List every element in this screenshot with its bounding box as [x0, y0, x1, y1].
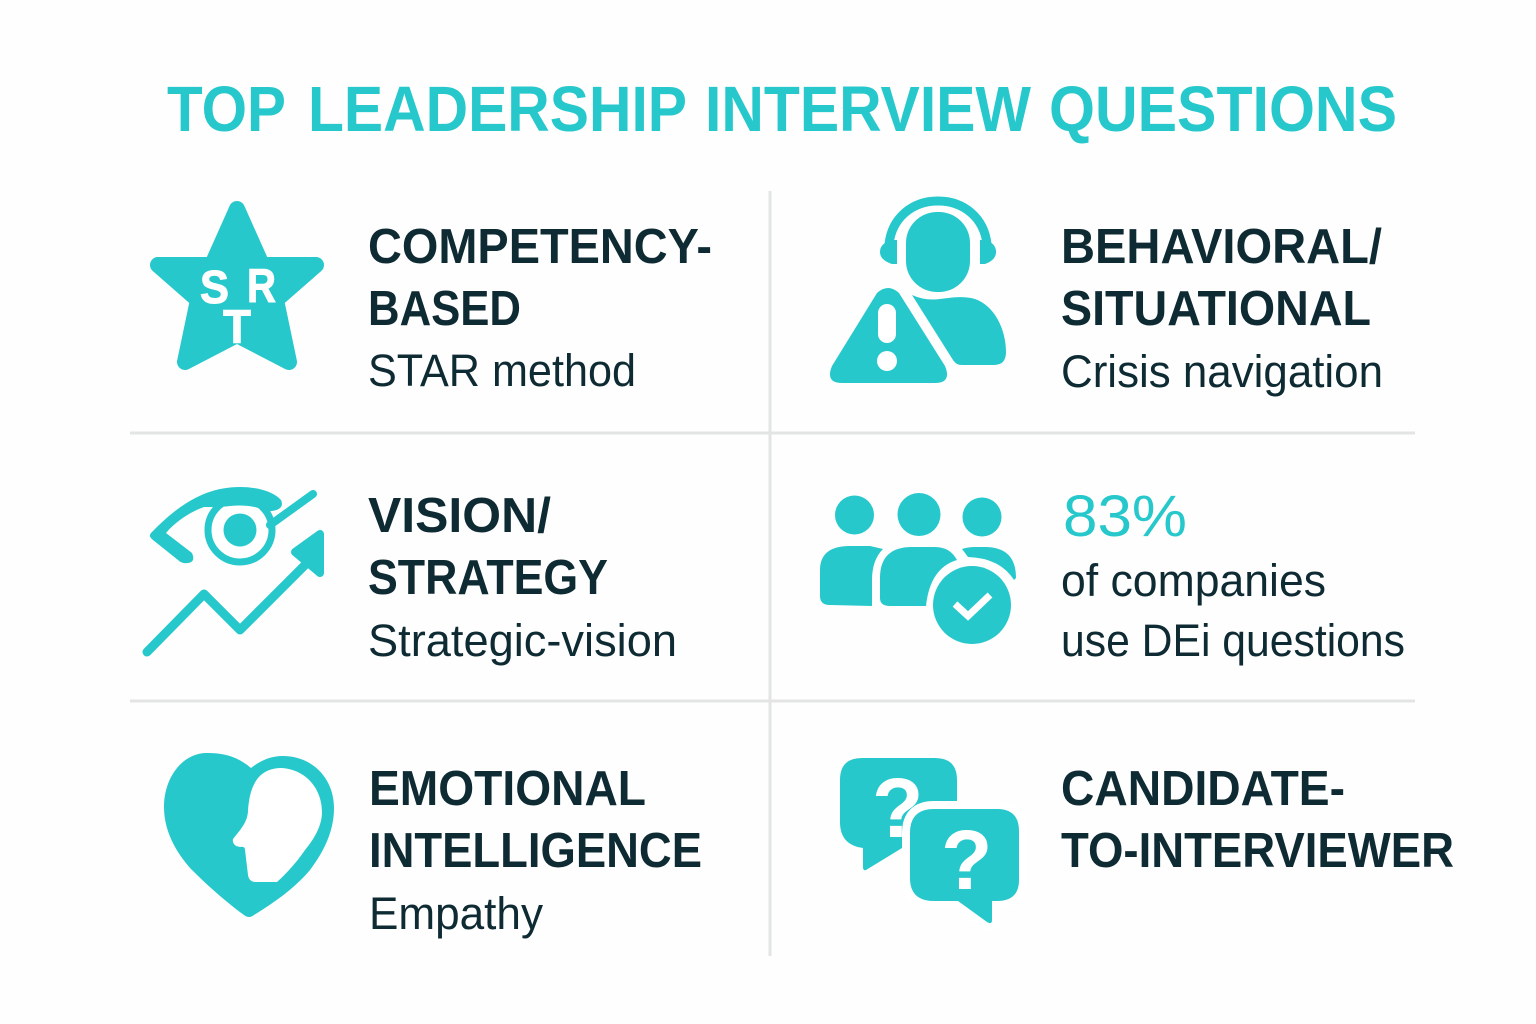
heading: vision/strategy: [368, 489, 608, 605]
icon: STAR star: S: [200, 261, 229, 313]
panel: competency-based: [158, 209, 712, 396]
heading: competency-based: [368, 220, 712, 336]
heading: competency-based: BASED: [368, 282, 521, 336]
panel: emotional intelligence: [164, 753, 702, 939]
icon: STAR star: T: [223, 300, 251, 353]
panel: DEI statistic: [820, 484, 1405, 666]
icon: heart with face profile: [164, 753, 334, 917]
icon: question speech bubbles: ?: [941, 813, 992, 907]
panel: vision/strategy: [147, 487, 677, 666]
heading: candidate-to-interviewer: TO-INTERVIEWER: [1061, 824, 1454, 878]
icon: person with headset and warning: [830, 201, 1006, 383]
heading: candidate-to-interviewer: CANDIDATE-: [1061, 762, 1345, 816]
heading: candidate-to-interviewer: [1061, 762, 1454, 878]
icon: STAR star: [158, 209, 316, 362]
heading: vision/strategy: VISION/: [368, 489, 551, 543]
icon: people with check badge: [820, 493, 1016, 644]
title: INTERVIEW: [705, 73, 1032, 145]
heading: behavioral/situational: BEHAVIORAL/: [1061, 220, 1382, 274]
icon: STAR star: R: [247, 259, 276, 312]
icon: eye and rising arrow: [147, 487, 320, 652]
icon: question speech bubbles: [840, 758, 1019, 923]
statistic: 83%: 83%: [1063, 484, 1187, 549]
heading: competency-based: COMPETENCY-: [368, 220, 712, 274]
title: [167, 73, 1397, 145]
heading: behavioral/situational: [1061, 220, 1382, 336]
panel: candidate-to-interviewer: [840, 758, 1454, 923]
text: of companies use DEi questions: of companies: [1061, 555, 1326, 606]
title: QUESTIONS: [1049, 73, 1397, 145]
heading: behavioral/situational: SITUATIONAL: [1061, 282, 1371, 336]
heading: emotional intelligence: EMOTIONAL: [369, 762, 646, 816]
title: TOP: [167, 73, 286, 145]
title: LEADERSHIP: [308, 73, 687, 145]
panel: behavioral/situational: [830, 201, 1383, 397]
subtext: strategic-vision: Strategic-vision: [368, 615, 677, 666]
text: of companies use DEi questions: use DEi questions: [1061, 615, 1405, 666]
subtext: crisis navigation: Crisis navigation: [1061, 346, 1383, 397]
heading: emotional intelligence: [369, 762, 702, 878]
heading: vision/strategy: STRATEGY: [368, 551, 608, 605]
subtext: empathy: Empathy: [369, 888, 543, 939]
icon: question speech bubbles: ?: [872, 761, 923, 855]
heading: emotional intelligence: INTELLIGENCE: [369, 824, 702, 878]
text: of companies use DEi questions: [1061, 555, 1405, 666]
subtext: STAR method: STAR method: [368, 345, 636, 396]
